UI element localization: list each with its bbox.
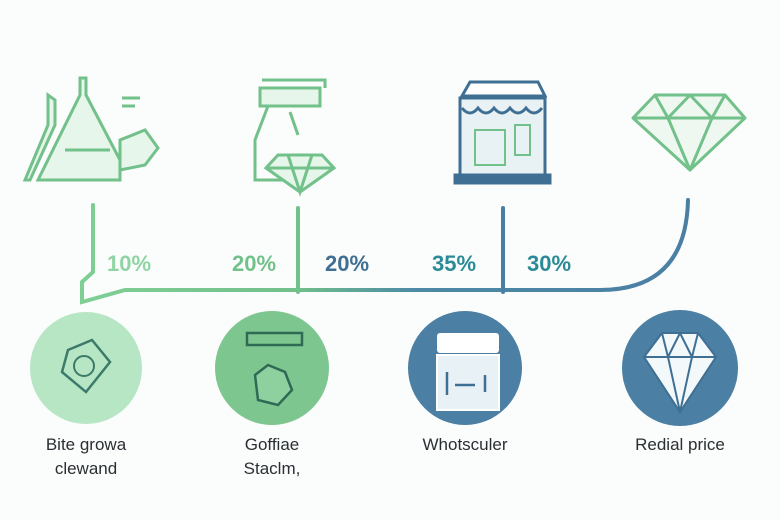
connector line: [86, 368, 680, 372]
percentages: 20%: [325, 251, 369, 276]
label 3: Whotsculer: [422, 435, 508, 454]
label 2: Goffiae: [245, 435, 299, 454]
flow lines: [82, 200, 688, 302]
label 1: [46, 435, 126, 478]
percentages: [107, 251, 571, 276]
label 2: [244, 435, 300, 478]
circle 2: [215, 311, 329, 425]
percentages: 30%: [527, 251, 571, 276]
icon: store: [455, 82, 550, 183]
percentages: 10%: [107, 251, 151, 276]
icon: factory: [25, 78, 158, 180]
label 1: clewand: [55, 459, 117, 478]
icon: diamond: [633, 95, 745, 170]
label 2: Staclm,: [244, 459, 300, 478]
icon: cutting tool: [255, 80, 334, 192]
label 1: Bite growa: [46, 435, 126, 454]
percentages: 35%: [432, 251, 476, 276]
percentages: 20%: [232, 251, 276, 276]
circle 4: [622, 310, 738, 426]
label 4: Redial price: [635, 435, 725, 454]
circle 1: [30, 312, 142, 424]
circle 3: [408, 311, 522, 425]
